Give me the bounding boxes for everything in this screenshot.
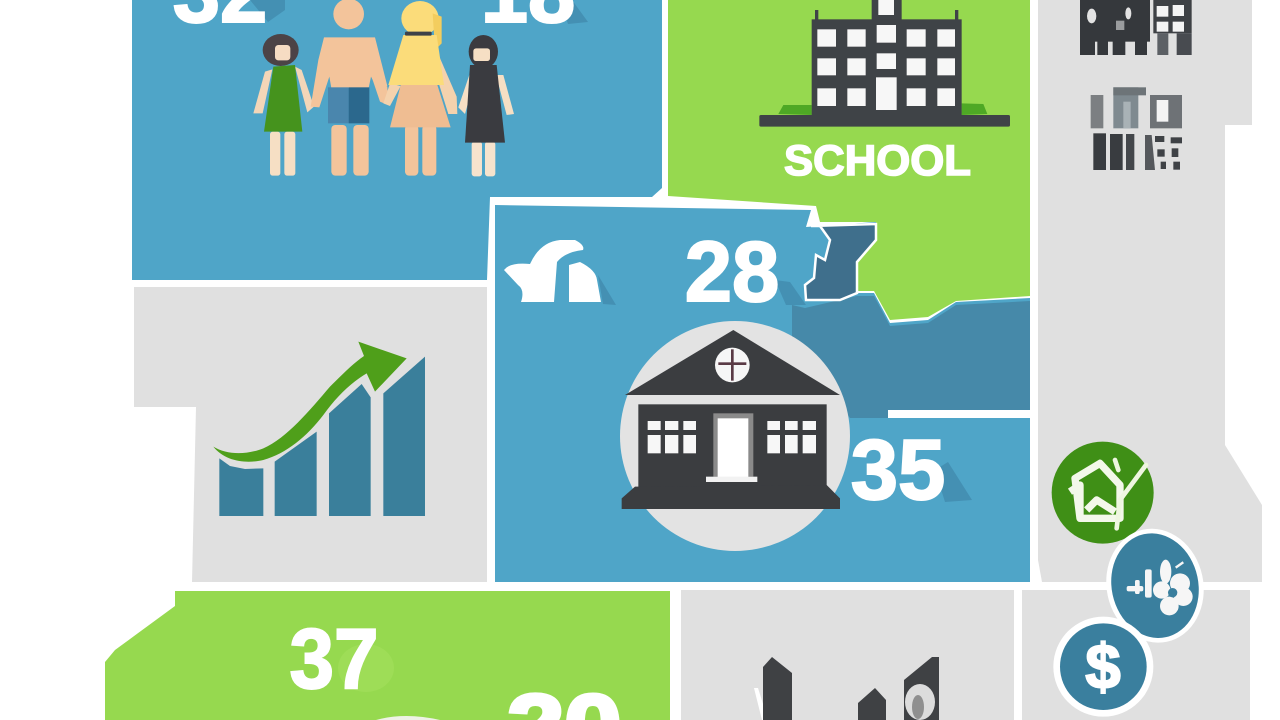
panel: bottom grey middle xyxy=(681,590,1014,720)
bars xyxy=(219,357,425,516)
number 35: 35 xyxy=(851,423,945,518)
figure: girl in black dress xyxy=(458,35,514,176)
icon: school building xyxy=(759,0,1010,127)
icon: hospital xyxy=(620,321,850,551)
icon: white houses xyxy=(504,240,616,305)
trend arrow xyxy=(213,342,407,462)
icon: dollar badge: $ xyxy=(1085,632,1121,702)
icon: family of four xyxy=(253,0,514,176)
shape: dark torn piece xyxy=(805,224,876,300)
divider rule xyxy=(888,410,1032,418)
panel: bottom grey right xyxy=(1022,590,1250,720)
school label: SCHOOL xyxy=(784,137,971,185)
panel: growth chart xyxy=(134,287,487,582)
panel: far-right column xyxy=(1038,0,1262,582)
icon fragment xyxy=(376,716,440,720)
number 28: 28 xyxy=(685,225,779,320)
darker region xyxy=(792,296,1030,418)
bar chart xyxy=(213,342,425,516)
hospital roof xyxy=(625,330,840,395)
icon: grey building xyxy=(1091,87,1182,170)
red cross badge xyxy=(715,348,750,382)
icon: dark spikes xyxy=(754,657,939,720)
figure: girl in green dress xyxy=(253,34,314,176)
icon: dollar badge xyxy=(1053,617,1153,717)
figure: woman with blonde hair xyxy=(383,1,457,176)
panel: population xyxy=(132,0,662,280)
panel: healthcare xyxy=(495,205,1032,582)
figure: man xyxy=(311,0,388,176)
panel: school xyxy=(668,0,1030,320)
icon: green house badge xyxy=(1052,442,1154,544)
icon: teal badge with burst xyxy=(1096,520,1214,652)
hospital body xyxy=(622,404,840,509)
hospital backdrop circle xyxy=(620,321,850,551)
panel: bottom green xyxy=(105,591,670,720)
number 37: 37 xyxy=(290,612,378,707)
icon: dark building xyxy=(1080,0,1192,55)
